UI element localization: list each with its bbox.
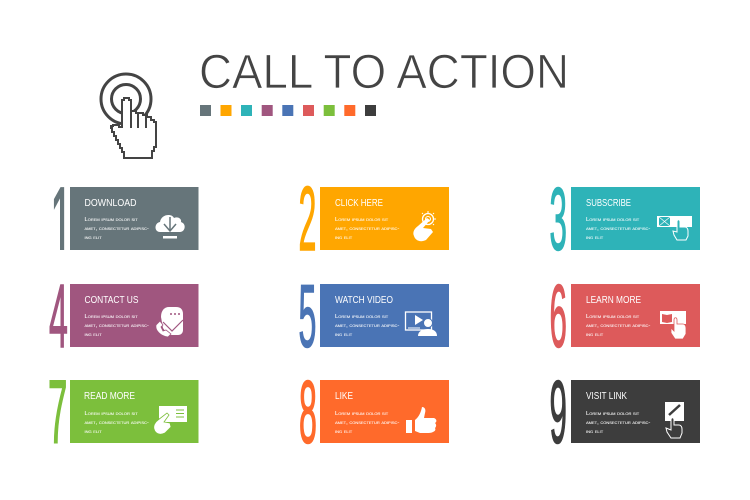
- body text: amet, consectetur adipisc-: [335, 323, 399, 329]
- body text: Lorem ipsum dolor sit: [335, 411, 389, 417]
- body text: Lorem ipsum dolor sit: [586, 411, 640, 417]
- panel: contact us: [49, 266, 198, 367]
- body text: amet, consectetur adipisc-: [586, 323, 650, 329]
- number 7: 7: [48, 361, 67, 463]
- heading: subscribe: SUBSCRIBE: [586, 197, 631, 209]
- panel: watch video: [298, 268, 449, 366]
- icon: pointer hand clicking: [101, 74, 156, 158]
- body text: ing elit: [84, 235, 102, 241]
- body text: amet, consectetur adipisc-: [335, 226, 399, 232]
- body text: ing elit: [586, 429, 604, 435]
- icon: link card with hand: [665, 402, 684, 438]
- body text: amet, consectetur adipisc-: [586, 420, 650, 426]
- body text: Lorem ipsum dolor sit: [335, 217, 389, 223]
- heading: visit link: VISIT LINK: [586, 390, 627, 402]
- body text: Lorem ipsum dolor sit: [84, 217, 138, 223]
- number 9: 9: [550, 364, 567, 463]
- panel: read more: [48, 361, 198, 463]
- body text: ing elit: [586, 235, 604, 241]
- body text: ing elit: [84, 429, 102, 435]
- icon: cloud download: [156, 215, 185, 238]
- panel: like: [299, 364, 449, 462]
- body text: Lorem ipsum dolor sit: [84, 411, 138, 417]
- panel: visit link: [550, 364, 700, 463]
- body text: ing elit: [84, 332, 102, 338]
- heading: watch video: WATCH VIDEO: [335, 294, 393, 306]
- number 2: 2: [298, 170, 316, 270]
- number 5: 5: [298, 268, 316, 366]
- heading: click here: CLICK HERE: [335, 197, 383, 209]
- body text: Lorem ipsum dolor sit: [335, 314, 389, 320]
- icon: video screen with viewer: [406, 312, 437, 336]
- body text: amet, consectetur adipisc-: [335, 420, 399, 426]
- panel: click here: [298, 170, 449, 270]
- body text: ing elit: [335, 429, 353, 435]
- body text: Lorem ipsum dolor sit: [84, 314, 138, 320]
- body text: amet, consectetur adipisc-: [84, 323, 149, 329]
- number 1: 1: [50, 168, 72, 281]
- icon: text card with hand: [154, 406, 187, 434]
- number 6: 6: [550, 268, 567, 367]
- body text: amet, consectetur adipisc-: [84, 420, 149, 426]
- icon: envelope button with hand: [657, 216, 692, 240]
- heading: learn more: LEARN MORE: [586, 294, 641, 306]
- icon: book button with hand: [660, 311, 686, 339]
- number 3: 3: [550, 171, 567, 270]
- body text: ing elit: [335, 235, 353, 241]
- body text: ing elit: [586, 332, 604, 338]
- panel: learn more: [550, 268, 700, 367]
- color legend squares: [200, 105, 376, 116]
- heading: read more: READ MORE: [84, 390, 135, 402]
- body text: Lorem ipsum dolor sit: [586, 314, 640, 320]
- heading: download: DOWNLOAD: [84, 197, 137, 209]
- icon: thumbs up: [406, 407, 436, 433]
- panel: subscribe: [550, 171, 700, 270]
- number 4: 4: [49, 266, 68, 367]
- heading: contact us: CONTACT US: [84, 294, 138, 306]
- body text: ing elit: [335, 332, 353, 338]
- icon: tap on target: [413, 211, 436, 241]
- panel: download: [54, 187, 198, 250]
- body text: amet, consectetur adipisc-: [84, 226, 149, 232]
- body text: amet, consectetur adipisc-: [586, 226, 650, 232]
- icon: chat and mail phone: [156, 307, 183, 337]
- body text: Lorem ipsum dolor sit: [586, 217, 640, 223]
- heading: like: LIKE: [335, 390, 353, 402]
- number 8: 8: [299, 364, 317, 462]
- title: CALL TO ACTION: [199, 46, 569, 99]
